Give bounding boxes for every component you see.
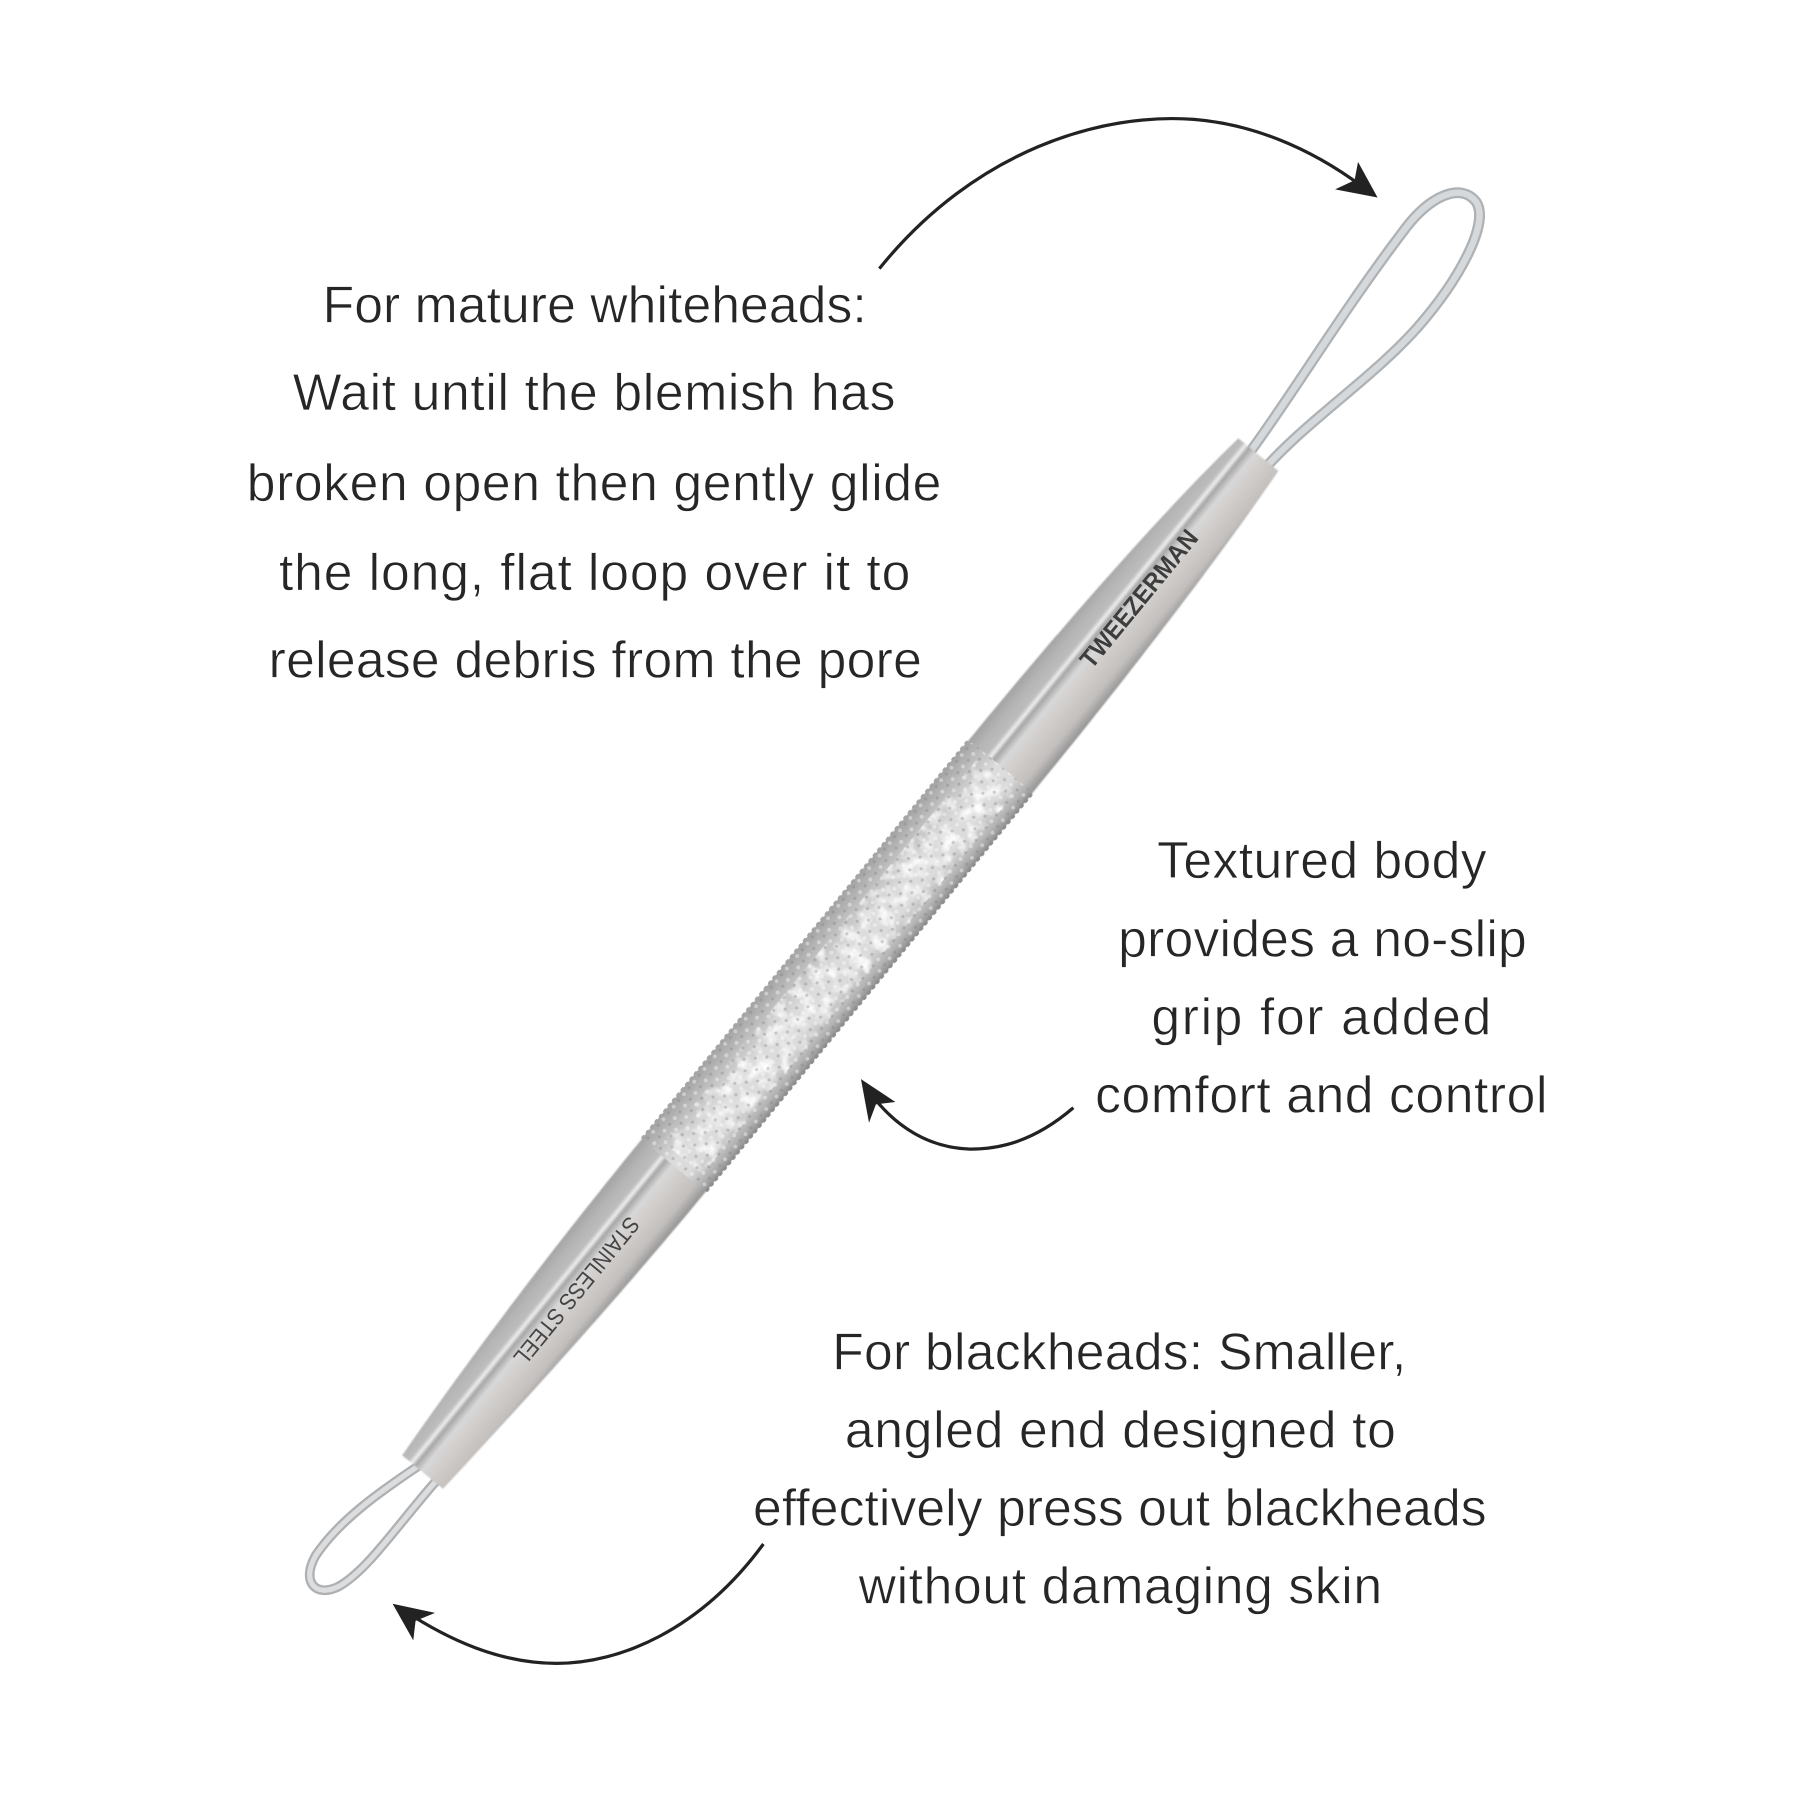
text block: blackheads: without damaging skin	[858, 1557, 1382, 1615]
text block: blackheads: effectively press out blackheads	[753, 1479, 1487, 1537]
extractor tool	[310, 193, 1480, 1590]
text block: blackheads	[753, 1323, 1487, 1615]
text block: textured body: Textured body	[1157, 831, 1487, 889]
text block: mature whiteheads: the long, flat loop over it to	[279, 543, 910, 601]
text block: textured body: comfort and control	[1095, 1065, 1547, 1123]
engraved brand: TWEEZERMAN	[1075, 524, 1204, 674]
text block: mature whiteheads: For mature whiteheads:	[323, 276, 867, 334]
handle	[391, 427, 1289, 1498]
text block: textured body: grip for added	[1151, 987, 1491, 1045]
engraved material: STAINLESS STEEL	[508, 1212, 645, 1370]
text block: mature whiteheads: Wait until the blemish has	[293, 363, 895, 421]
text block: textured body	[1095, 831, 1547, 1123]
text block: blackheads: angled end designed to	[845, 1401, 1396, 1459]
text block: blackheads: For blackheads: Smaller,	[832, 1323, 1406, 1381]
text block: textured body: provides a no-slip	[1118, 909, 1527, 967]
arrow: to small loop	[393, 1544, 763, 1663]
smooth body	[391, 427, 1289, 1498]
textured grip	[642, 740, 1033, 1192]
arrow: to textured body	[861, 1079, 1073, 1149]
text block: mature whiteheads	[247, 276, 941, 688]
arrow: to large loop	[879, 119, 1378, 269]
large loop	[1249, 193, 1480, 471]
text block: mature whiteheads: release debris from the pore	[269, 630, 922, 688]
small loop	[310, 1465, 436, 1590]
text block: mature whiteheads: broken open then gently glide	[247, 454, 941, 512]
